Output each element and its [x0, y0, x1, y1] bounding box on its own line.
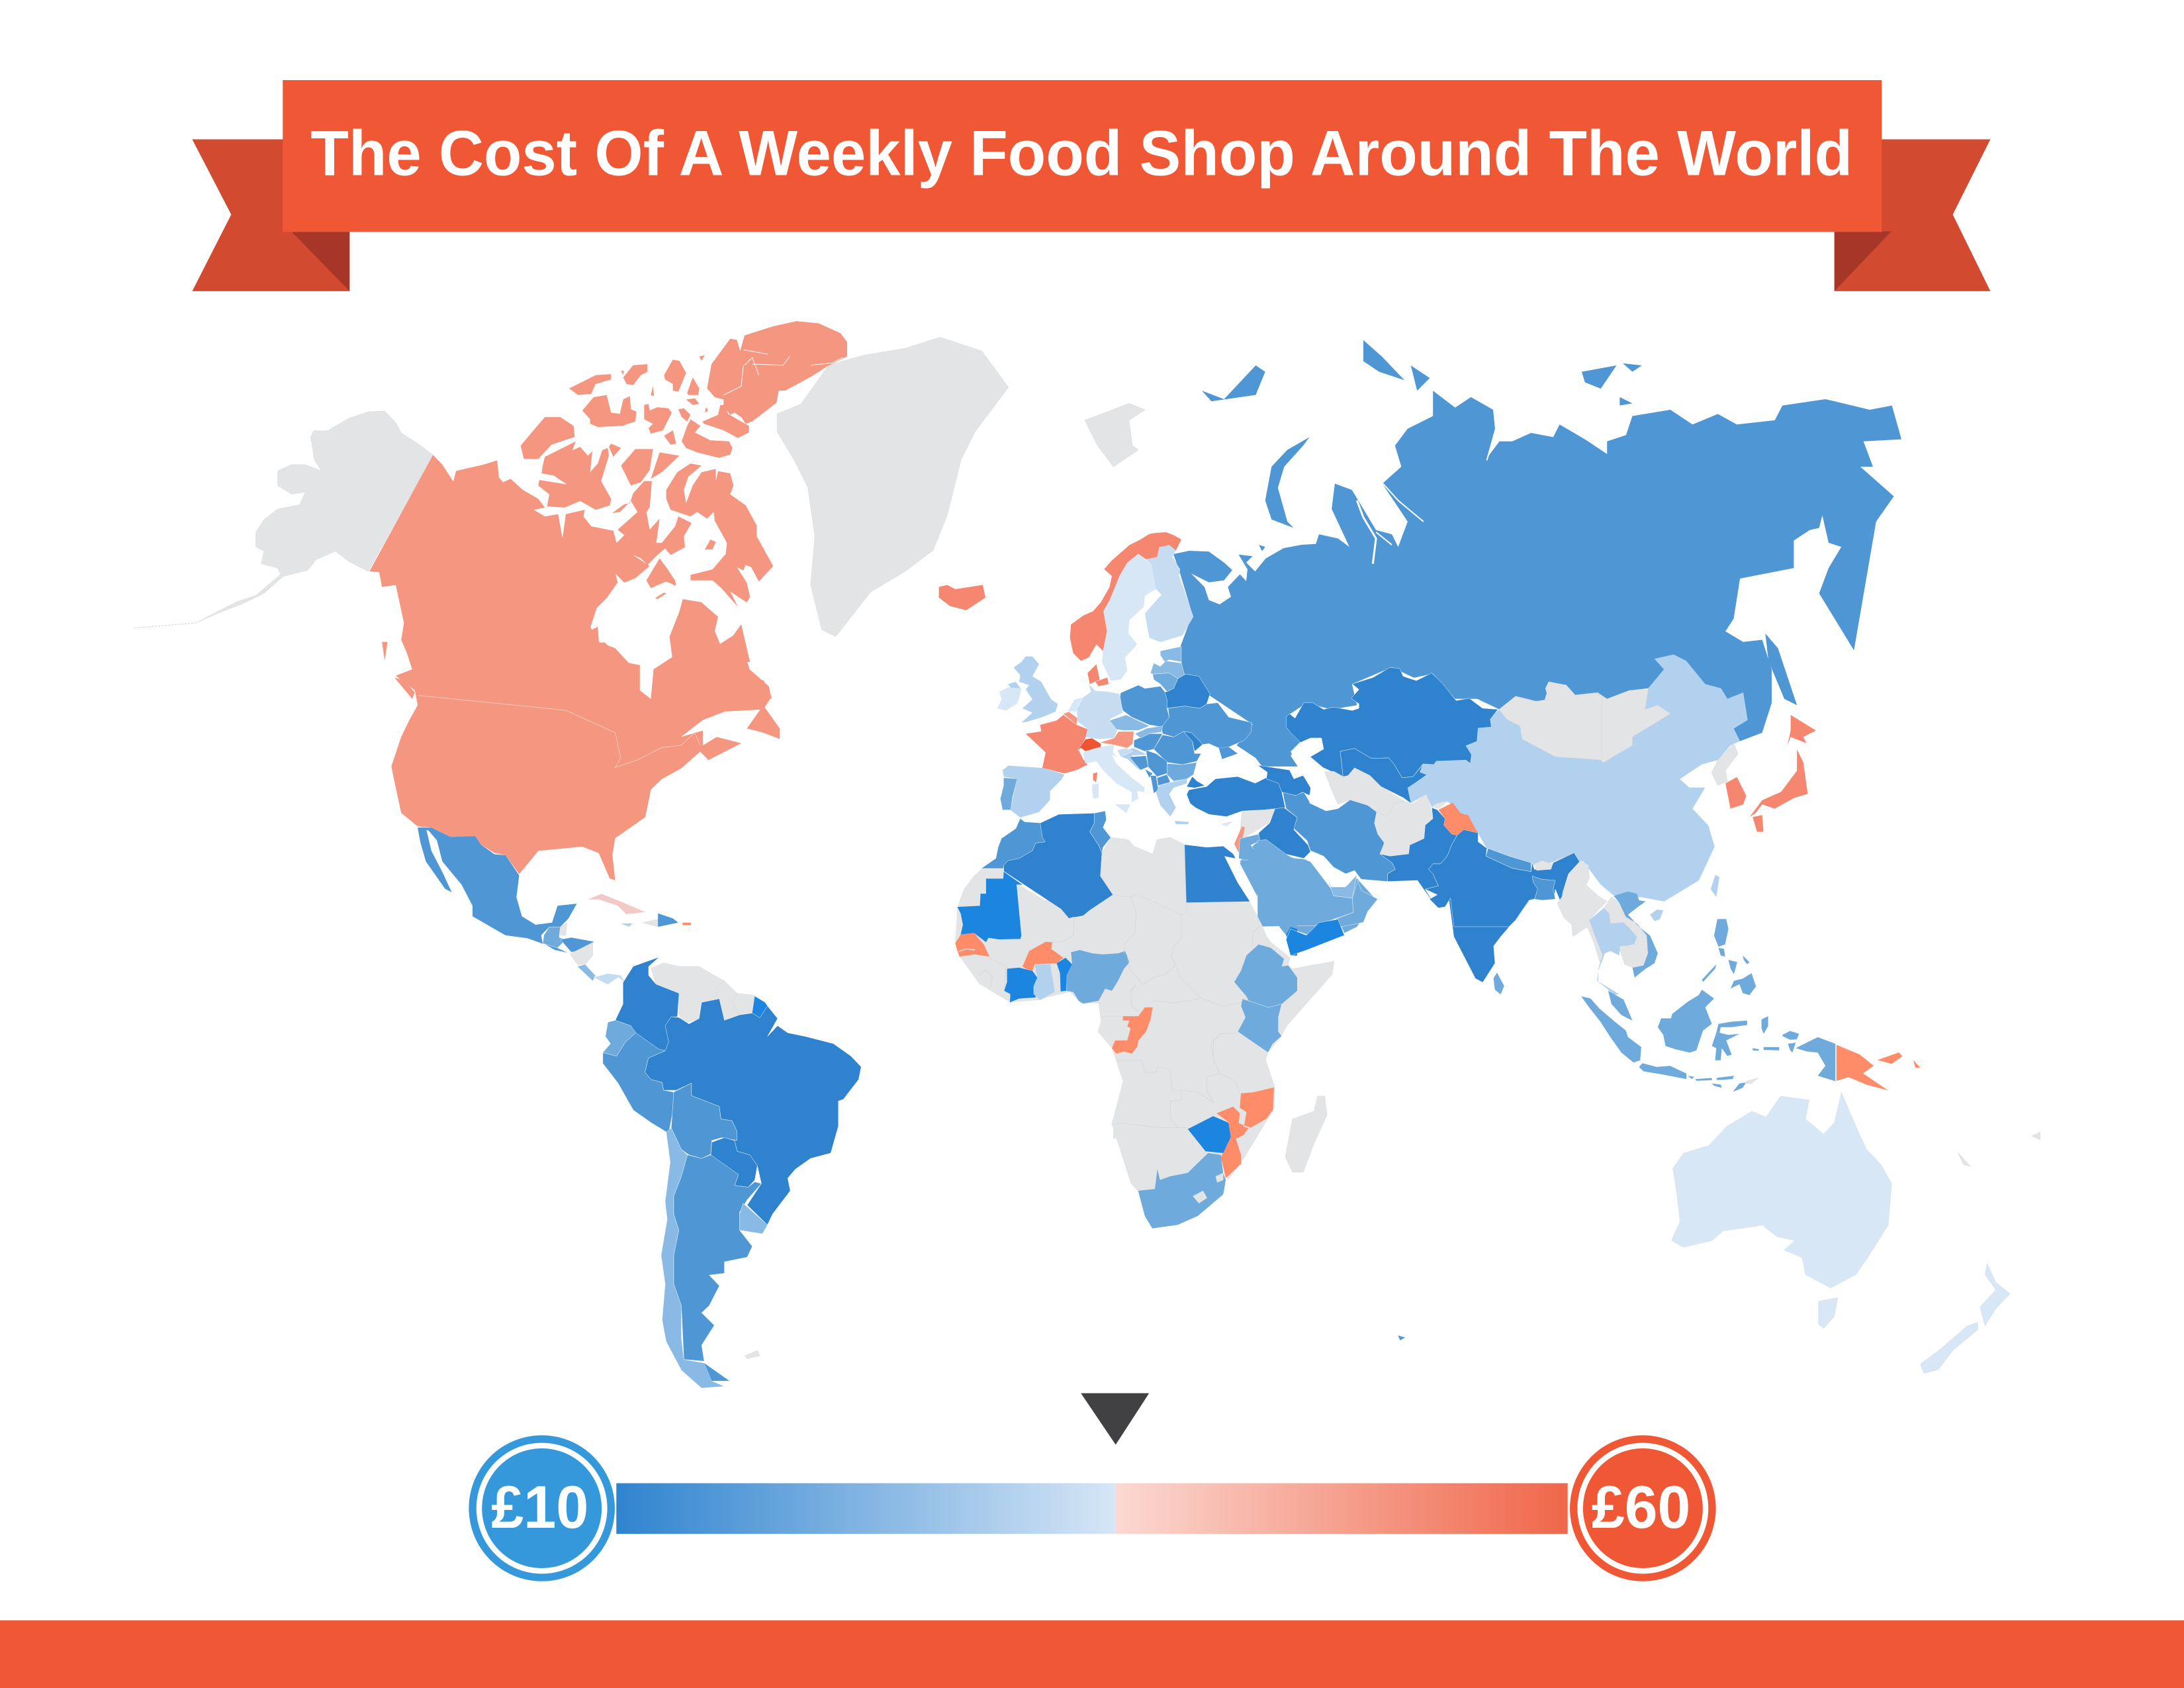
- Crete: [1175, 821, 1189, 824]
- Venezuela: [651, 963, 725, 1024]
- Franz Josef Land: [1202, 365, 1265, 401]
- Nepal: [1486, 849, 1531, 872]
- Japan: [1749, 715, 1816, 832]
- Alaska: [195, 411, 433, 623]
- East Timor: [1745, 1078, 1758, 1084]
- Mozambique north: [1240, 1088, 1274, 1127]
- Togo: [1050, 964, 1060, 992]
- map: Russia, East Asia and Arabia: [1085, 340, 1901, 956]
- Slovenia: [1117, 748, 1133, 757]
- Laos: [1604, 897, 1647, 945]
- New Britain: [1878, 1053, 1903, 1064]
- South Korea: [1725, 777, 1747, 809]
- badge: £60: £60: [1592, 1474, 1690, 1541]
- Arctic islands: [1259, 363, 1642, 551]
- Bolivia: [671, 1083, 737, 1158]
- Iran: [1283, 792, 1395, 882]
- Ellesmere fjords: [723, 350, 842, 395]
- West Papua: [1782, 1031, 1835, 1081]
- Australia: [1671, 1092, 1891, 1288]
- Spain: [1003, 766, 1064, 818]
- Prince Charles Island: [705, 539, 716, 549]
- Sakhalin: [1765, 633, 1797, 705]
- Java: [1639, 1063, 1686, 1079]
- Cambodia: [1619, 944, 1648, 968]
- Libya: [1101, 837, 1187, 915]
- Jordan: [1239, 834, 1261, 861]
- Denmark: [1087, 664, 1109, 686]
- Madagascar: [1285, 1096, 1327, 1172]
- Kamchatka: [1819, 522, 1876, 650]
- Ellef Ringnes Island: [623, 364, 647, 385]
- Portugal: [1001, 778, 1017, 810]
- China: [1408, 655, 1748, 902]
- French Guiana: [752, 996, 768, 1018]
- Iraq: [1259, 808, 1310, 859]
- Finland: [1145, 545, 1193, 642]
- Lesotho: [1193, 1191, 1207, 1203]
- Western Mongolia: [1499, 682, 1602, 760]
- Syria: [1240, 809, 1275, 839]
- India: [1425, 829, 1580, 927]
- southern India: [1449, 898, 1529, 982]
- Cuba: [588, 894, 645, 914]
- Bulgaria: [1167, 763, 1197, 781]
- Caucasus: [1257, 765, 1312, 796]
- Svalbard: [1085, 403, 1145, 467]
- Iceland: [939, 585, 985, 610]
- Taiwan: [1711, 875, 1719, 897]
- Prince of Wales Island: [621, 449, 653, 485]
- Axel Heiberg Island: [664, 359, 686, 392]
- Morocco: [981, 819, 1045, 868]
- Yemen west: [1286, 927, 1297, 955]
- Borneo: [1658, 990, 1714, 1053]
- Slovakia: [1135, 726, 1163, 738]
- map: southern Africa and South America: [570, 943, 1249, 1388]
- title ribbon: [192, 80, 1990, 291]
- Sardinia: [1092, 783, 1099, 799]
- Sumatra: [1581, 996, 1641, 1062]
- map: Yemen east: [1286, 919, 1344, 956]
- Romania: [1154, 731, 1201, 765]
- map: northern Canada and Arctic archipelago: [503, 321, 847, 662]
- Saudi Arabia: [1240, 840, 1352, 935]
- Ukraine: [1161, 703, 1252, 748]
- Moluccas: [1752, 1016, 1779, 1051]
- Russia: [1173, 391, 1901, 767]
- Baffin Island: [666, 463, 773, 607]
- Burkina Faso: [1023, 942, 1064, 971]
- Bougainville: [1913, 1060, 1921, 1068]
- Serbia: [1146, 750, 1167, 776]
- ribbon band: [283, 80, 1882, 232]
- New Caledonia: [1958, 1152, 1971, 1166]
- Haiti: [643, 919, 658, 927]
- footer bar: [0, 1620, 2184, 1688]
- map: North America: [135, 411, 985, 953]
- Southampton Island: [647, 558, 676, 588]
- Nigeria: [1067, 950, 1130, 1004]
- Guyana: [714, 981, 740, 1020]
- Netherlands: [1068, 697, 1083, 712]
- Estonia: [1160, 647, 1181, 662]
- Zimbabwe: [1188, 1116, 1231, 1153]
- Ghana: [1034, 964, 1054, 1000]
- Albania: [1150, 776, 1159, 793]
- Hungary: [1134, 733, 1163, 751]
- Mozambique south: [1220, 1123, 1249, 1178]
- map: Southeast Asia: [1557, 861, 1835, 1092]
- map: Greenland: [777, 337, 1009, 637]
- Tunisia: [1090, 811, 1111, 853]
- map: Europe and Turkey: [997, 532, 1310, 861]
- Africa north and central base: [955, 845, 1297, 1139]
- Vancouver Island: [394, 678, 415, 699]
- Crimea: [1219, 747, 1238, 759]
- Belarus: [1165, 674, 1210, 708]
- Caspian Sea: [1291, 738, 1338, 811]
- Mongolia: [1500, 682, 1670, 762]
- Moldova: [1183, 731, 1203, 751]
- gradient bar: cheap: [616, 1483, 1116, 1534]
- price scale legend: [469, 1435, 1716, 1581]
- US Canada border: [419, 696, 700, 767]
- France: [1026, 715, 1087, 773]
- Novaya Zemlya: [1265, 437, 1310, 528]
- Bhutan: [1534, 861, 1552, 870]
- Sicily: [1115, 804, 1130, 813]
- Ethiopia: [1234, 945, 1297, 1008]
- map: northern and central Africa: [955, 811, 1297, 1139]
- Bathurst Island: [644, 404, 672, 434]
- Newfoundland: [747, 705, 780, 739]
- Latvia: [1150, 661, 1185, 679]
- Honduras: [561, 937, 594, 952]
- Melville Island: [569, 374, 611, 395]
- Aleutian Islands: [135, 623, 195, 628]
- Quebec north: [670, 599, 750, 662]
- Gambia: [958, 949, 975, 951]
- Thailand: [1590, 908, 1637, 995]
- Turkmenistan: [1325, 768, 1404, 816]
- Papua New Guinea: [1837, 1045, 1888, 1090]
- Myanmar: [1557, 861, 1607, 964]
- Israel: [1234, 826, 1245, 854]
- Brazil: [645, 999, 861, 1225]
- Uzbekistan: [1340, 749, 1428, 803]
- Fiji: [2032, 1132, 2040, 1140]
- Belgium: [1064, 712, 1077, 725]
- Jamaica: [621, 923, 633, 927]
- Wakhan: [1432, 801, 1448, 809]
- Dominican Republic: [658, 914, 678, 927]
- Mozambique west: [1216, 1107, 1244, 1139]
- Benin: [1057, 958, 1072, 992]
- gradient bar: expensive: [1116, 1483, 1568, 1534]
- Norway: [1070, 532, 1181, 661]
- Mauritania: [958, 872, 1023, 942]
- Canada and USA: [369, 455, 772, 880]
- Corsica: [1093, 773, 1097, 782]
- Greece: [1156, 779, 1187, 816]
- Victoria Island: [538, 442, 611, 510]
- ribbon tail left: [192, 139, 349, 291]
- South Africa: [1138, 1153, 1226, 1229]
- Mexico: [418, 827, 576, 944]
- Tierra del Fuego: [704, 1363, 729, 1381]
- Nicaragua: [570, 943, 593, 964]
- Kerguelen: [1398, 1335, 1405, 1340]
- United Kingdom: [1014, 657, 1058, 723]
- Severnaya Zemlya: [1363, 340, 1404, 380]
- map: Africa base: [955, 861, 1529, 1191]
- pointer triangle: [1081, 1393, 1149, 1445]
- Hainan: [1650, 910, 1663, 921]
- Paraguay: [711, 1138, 757, 1187]
- Lithuania: [1153, 673, 1178, 692]
- Cyprus: [1221, 821, 1233, 826]
- Algeria: [1004, 813, 1113, 918]
- Sri Lanka: [1494, 972, 1504, 994]
- Croatia: [1118, 748, 1147, 771]
- ribbon tail right: [1835, 139, 1990, 291]
- Belize: [561, 923, 567, 935]
- Uruguay: [740, 1203, 768, 1234]
- Panama: [594, 974, 625, 984]
- Switzerland: [1077, 738, 1101, 751]
- Italy: [1083, 745, 1145, 802]
- Oman: [1335, 878, 1376, 933]
- Czech Republic: [1110, 715, 1150, 730]
- New Zealand: [1921, 1263, 2010, 1374]
- Sweden: [1102, 554, 1156, 680]
- Saudi Arabia north-east: [1257, 839, 1353, 927]
- Tasmania: [1819, 1297, 1838, 1329]
- badge: £10: £10: [491, 1474, 588, 1541]
- Lesser Sunda Islands: [1688, 1076, 1746, 1092]
- Suriname: [732, 994, 754, 1015]
- Ivory Coast: [1004, 968, 1037, 1002]
- Pakistan: [1380, 808, 1457, 907]
- Afghanistan: [1375, 794, 1433, 856]
- Yemen: [1286, 919, 1344, 956]
- Republic of Congo: [1112, 1008, 1153, 1054]
- African borders: [978, 894, 1262, 1127]
- Bylot Island area: [682, 419, 733, 458]
- Bosnia: [1130, 756, 1148, 770]
- Peru: [603, 1033, 674, 1133]
- Oman north: [1336, 880, 1378, 927]
- Austria: [1100, 731, 1134, 748]
- Northern Ireland: [1008, 682, 1021, 690]
- Banks Island: [521, 417, 574, 459]
- Falkland Islands: [745, 1350, 760, 1359]
- Philippines: [1702, 919, 1756, 995]
- Argentina: [674, 1155, 761, 1361]
- Senegal: [955, 933, 989, 957]
- Prince Patrick Island: [582, 395, 637, 427]
- Germany: [1077, 684, 1123, 739]
- Montenegro: [1145, 769, 1153, 778]
- El Salvador: [544, 944, 569, 953]
- Kenya: [1238, 998, 1282, 1053]
- Macedonia: [1157, 774, 1170, 786]
- United Arab Emirates: [1327, 875, 1357, 898]
- northern mainland Canada: [503, 479, 692, 662]
- Thrace: [1187, 776, 1205, 788]
- badge: £10: [469, 1435, 615, 1581]
- Chile: [661, 1128, 725, 1388]
- Coats Island: [655, 592, 666, 599]
- Malaysia peninsula: [1608, 991, 1633, 1021]
- small Arctic islands: [609, 355, 708, 457]
- North Korea: [1711, 743, 1738, 786]
- Guatemala: [543, 927, 566, 948]
- Swaziland: [1216, 1173, 1223, 1182]
- Saudi Arabia west coast: [1240, 839, 1297, 933]
- Ireland: [997, 687, 1021, 710]
- Devon Island: [703, 405, 749, 438]
- map: Oceania: [1398, 1045, 2040, 1374]
- Vietnam: [1614, 892, 1658, 978]
- Ecuador: [603, 1020, 636, 1056]
- Puerto Rico: [682, 923, 691, 925]
- badge: £60: [1570, 1435, 1716, 1581]
- Somerset Island: [651, 452, 680, 479]
- Sulawesi: [1712, 1021, 1747, 1060]
- Costa Rica: [578, 964, 595, 981]
- Western China: [1408, 710, 1602, 882]
- Turkey: [1187, 776, 1285, 816]
- Russia inlets: [1357, 429, 1496, 564]
- title: The Cost Of A Weekly Food Shop Around The World: [310, 117, 1852, 189]
- Colombia: [615, 957, 679, 1051]
- Baja California: [418, 827, 451, 892]
- world map: [135, 321, 2040, 1388]
- map: Central and South Asia: [1257, 667, 1602, 927]
- Egypt: [1185, 845, 1250, 902]
- Kazakhstan: [1286, 667, 1498, 779]
- Kashmir region: [1438, 803, 1478, 835]
- Poland: [1120, 685, 1169, 727]
- Western Sahara: [958, 869, 1003, 906]
- Bangladesh: [1532, 876, 1555, 900]
- Haida Gwaii: [382, 642, 387, 661]
- Ellesmere Island: [707, 321, 847, 424]
